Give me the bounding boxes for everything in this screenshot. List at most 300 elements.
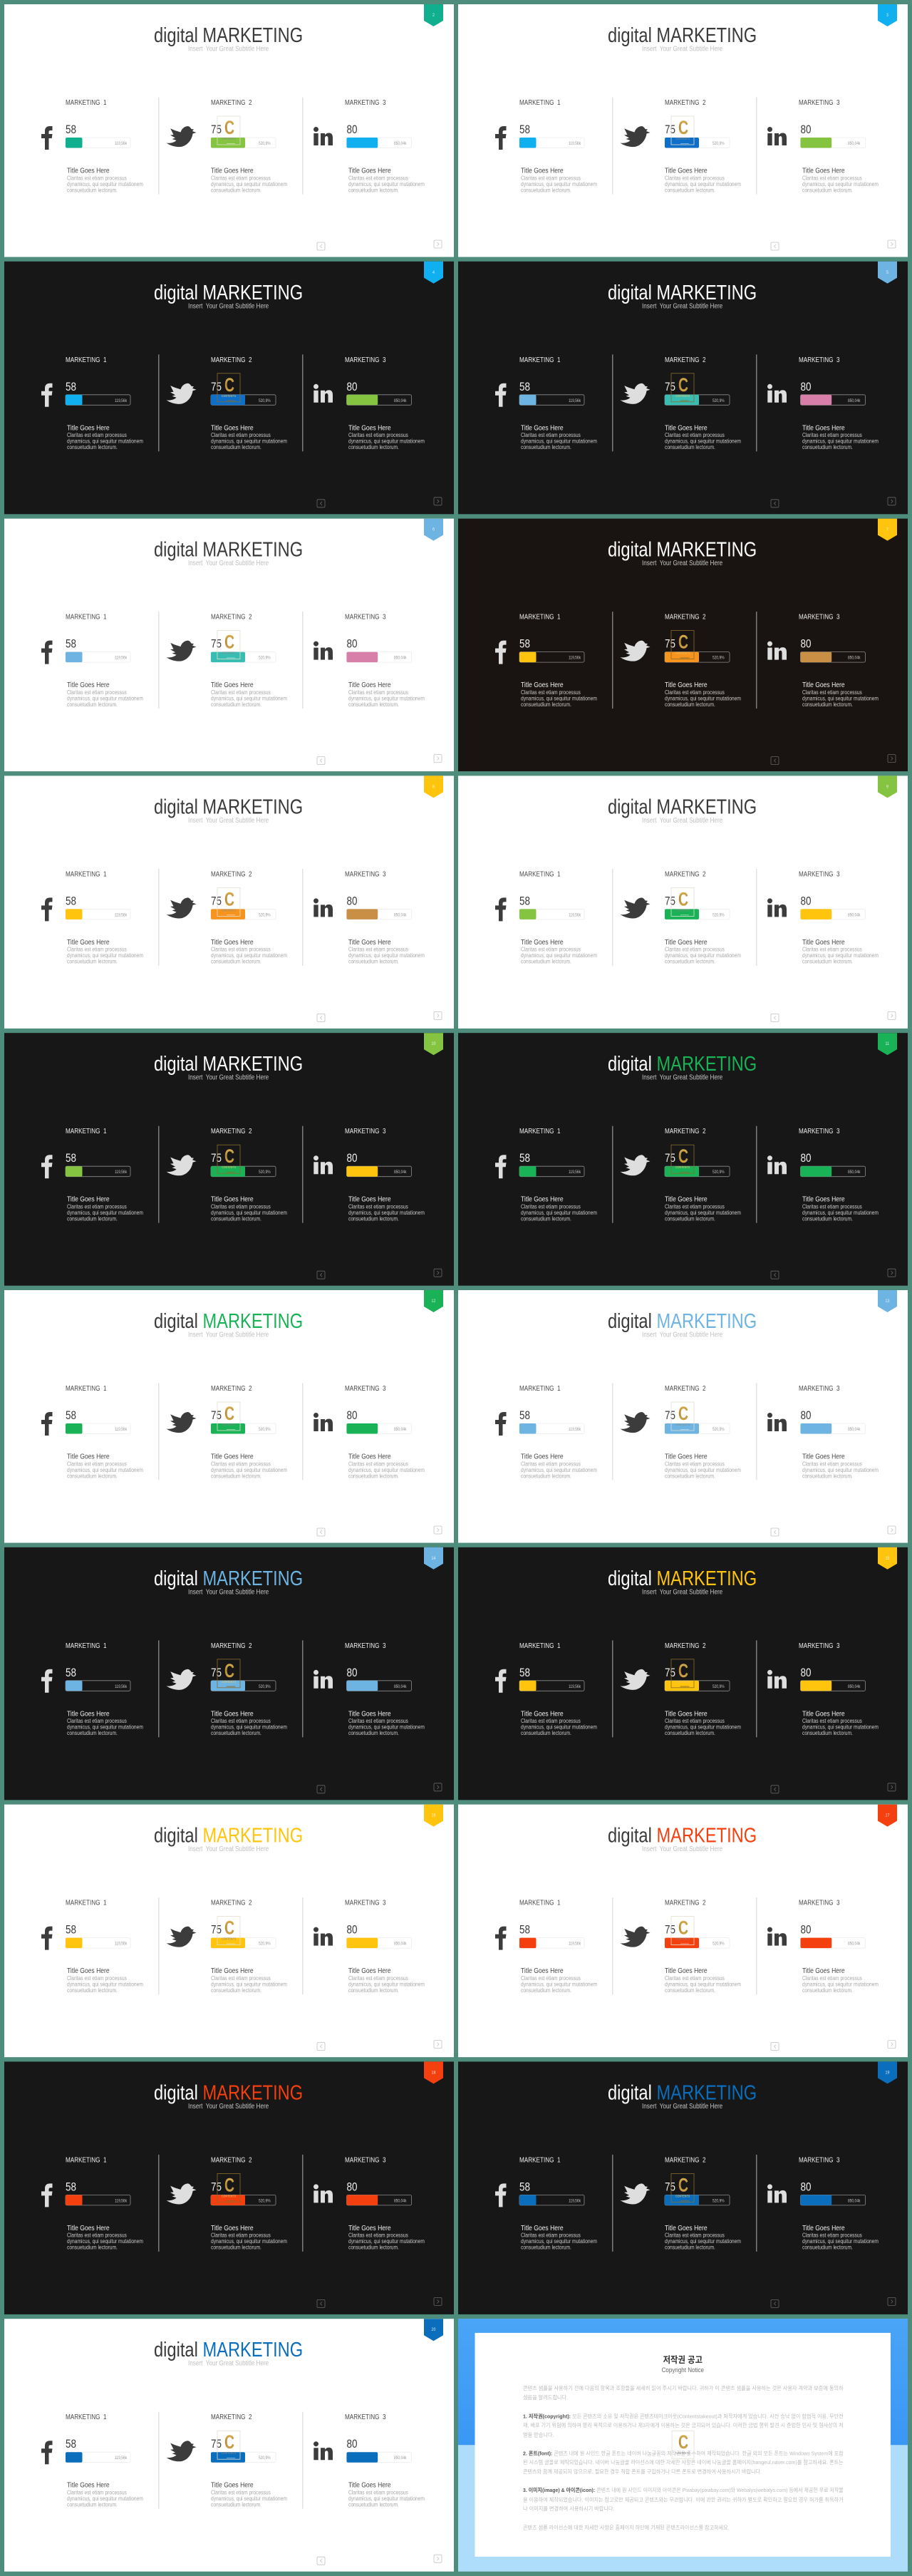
title text: Title Goes Here: [67, 424, 110, 433]
body text: Claritas est etiam processus: [67, 1974, 127, 1982]
watermark: [217, 116, 240, 145]
bar: [66, 138, 130, 148]
subtitle: Insert Your Great Subtitle Here: [188, 1588, 269, 1595]
number: 75: [211, 1923, 222, 1937]
column 3: MARKETING 3: [799, 1642, 840, 1649]
body text: Claritas est etiam processus: [67, 2232, 127, 2239]
column 3: MARKETING 3: [799, 98, 840, 106]
body text: consuetudium lectorum.: [665, 1987, 715, 1994]
nav buttons: [771, 498, 896, 508]
body text: consuetudium lectorum.: [67, 1987, 118, 1994]
column 3: MARKETING 3: [345, 356, 386, 364]
watermark: CONTENTS: [675, 651, 690, 655]
bar: 119,56k: [115, 142, 127, 146]
title: digital MARKETING: [154, 1309, 303, 1333]
watermark: C: [678, 1660, 688, 1681]
body text: Claritas est etiam processus: [348, 1974, 408, 1982]
body text: consuetudium lectorum.: [211, 2501, 261, 2508]
body text: Claritas est etiam processus: [67, 2489, 127, 2496]
icon: linkedin: [314, 1670, 333, 1689]
nav buttons: [771, 1011, 896, 1021]
subtitle: Insert Your Great Subtitle Here: [642, 1331, 722, 1339]
body text: Claritas est etiam processus: [521, 1203, 581, 1210]
bar: 119,56k: [569, 1170, 581, 1175]
body text: dynamicus, qui sequitur mutationem: [665, 1209, 741, 1216]
bar: [346, 1423, 412, 1434]
body text: dynamicus, qui sequitur mutationem: [348, 1466, 425, 1473]
number: 80: [801, 1666, 811, 1679]
body text: Claritas est etiam processus: [802, 946, 862, 953]
icon: facebook: [495, 641, 506, 664]
body text: consuetudium lectorum.: [211, 958, 261, 965]
icon: linkedin: [314, 2184, 333, 2203]
watermark: CONTENTS: [222, 1679, 236, 1684]
column 1: [495, 1127, 597, 1222]
title text: Title Goes Here: [521, 2224, 564, 2232]
bar: 850,04k: [848, 2199, 861, 2204]
column 2: [620, 1127, 741, 1222]
title text: Title Goes Here: [665, 681, 708, 689]
column 1: [495, 870, 597, 965]
panel: slide 3: [458, 4, 908, 257]
column 3: [767, 1384, 879, 1479]
body text: consuetudium lectorum.: [665, 2244, 715, 2251]
number: 58: [519, 381, 530, 393]
title: digital MARKETING: [608, 1052, 757, 1076]
title text: Title Goes Here: [802, 167, 845, 175]
body text: Claritas est etiam processus: [348, 2232, 408, 2239]
title: digital MARKETING: [608, 1309, 757, 1333]
body text: Claritas est etiam processus: [802, 431, 862, 438]
body text: dynamicus, qui sequitur mutationem: [802, 695, 879, 702]
intro paragraph: 콘텐츠 샘플을 사용하기 전에 다음의 항목과 조항들을 세세히 읽어 주시기 바랍니다. 귀하가 이 콘텐츠 샘플을 사용하는 것은 사용자 계약과 보증에 동의하: [523, 2384, 844, 2391]
body text: Claritas est etiam processus: [665, 1203, 725, 1210]
column 2: MARKETING 2: [665, 98, 706, 106]
body text: consuetudium lectorum.: [665, 443, 715, 450]
column 2: MARKETING 2: [211, 98, 252, 106]
nav buttons: [317, 2555, 442, 2565]
bar: 520,9%: [712, 398, 725, 403]
bar: [801, 909, 865, 919]
body text: consuetudium lectorum.: [665, 1729, 715, 1736]
body text: Claritas est etiam processus: [348, 175, 408, 181]
watermark: [671, 1659, 694, 1688]
title text: Title Goes Here: [348, 2481, 391, 2490]
bar: 119,56k: [569, 1684, 581, 1689]
bar: 119,56k: [115, 1684, 127, 1689]
panel: slide 17: [458, 1805, 908, 2057]
tab: 6: [432, 527, 435, 532]
body text: consuetudium lectorum.: [211, 1987, 261, 1994]
number: 80: [801, 123, 811, 136]
watermark: CONTENTS: [675, 2451, 690, 2455]
body text: Claritas est etiam processus: [67, 1717, 127, 1724]
title text: Title Goes Here: [802, 2224, 845, 2232]
body text: consuetudium lectorum.: [348, 1729, 399, 1736]
title text: Title Goes Here: [211, 1195, 254, 1204]
bar: [346, 1938, 412, 1948]
body text: consuetudium lectorum.: [211, 701, 261, 708]
bar: 520,9%: [712, 1684, 725, 1689]
number: 75: [211, 2180, 222, 2194]
subtitle: Insert Your Great Subtitle Here: [642, 1073, 722, 1081]
body text: Claritas est etiam processus: [211, 431, 271, 438]
icon: twitter: [167, 126, 197, 147]
body text: consuetudium lectorum.: [802, 1729, 853, 1736]
column 2: MARKETING 2: [665, 2156, 706, 2164]
icon: twitter: [620, 1412, 650, 1433]
column 2: [620, 98, 741, 193]
number: 58: [66, 123, 76, 136]
body text: dynamicus, qui sequitur mutationem: [802, 180, 879, 187]
icon: linkedin: [767, 1670, 787, 1689]
bar: 520,9%: [712, 656, 725, 661]
watermark: [672, 2431, 694, 2458]
column 1: MARKETING 1: [519, 2156, 561, 2164]
tab: [424, 2319, 443, 2341]
bar: 850,04k: [394, 1684, 407, 1689]
column 1: [41, 870, 143, 965]
watermark: C: [678, 2174, 688, 2195]
bar: 520,9%: [259, 656, 271, 661]
body text: dynamicus, qui sequitur mutationem: [211, 2238, 287, 2245]
bar: [66, 652, 130, 662]
column 2: MARKETING 2: [665, 870, 706, 878]
body text: consuetudium lectorum.: [665, 1215, 715, 1222]
bar: [346, 1166, 412, 1177]
column 2: [167, 98, 287, 193]
title: digital MARKETING: [608, 281, 757, 304]
column 2: [620, 1642, 741, 1736]
tab: [424, 2061, 443, 2083]
column 3: MARKETING 3: [799, 2156, 840, 2164]
number: 80: [347, 1666, 357, 1679]
body text: Claritas est etiam processus: [348, 431, 408, 438]
icon: facebook: [41, 2441, 53, 2464]
column 1: MARKETING 1: [519, 1127, 561, 1135]
number: 80: [347, 895, 357, 908]
nav buttons: [771, 755, 896, 765]
bar: 850,04k: [848, 1428, 861, 1432]
body text: consuetudium lectorum.: [211, 1215, 261, 1222]
bar: 850,04k: [394, 1428, 407, 1432]
tab: 18: [432, 2071, 436, 2076]
watermark: [217, 1145, 240, 1173]
tab: [424, 1805, 443, 1827]
number: 58: [519, 1666, 530, 1679]
tab: 8: [432, 785, 435, 790]
column 3: [767, 1127, 879, 1222]
column 3: MARKETING 3: [345, 2413, 386, 2421]
column 2: [167, 1899, 287, 1994]
column 3: MARKETING 3: [799, 356, 840, 364]
watermark: CONTENTS: [222, 2451, 236, 2455]
watermark: CONTENTS: [675, 908, 690, 912]
bar: [519, 1166, 584, 1177]
title text: Title Goes Here: [665, 1967, 708, 1975]
body text: Claritas est etiam processus: [665, 946, 725, 953]
column 1: MARKETING 1: [519, 1384, 561, 1392]
column 1: [41, 2156, 143, 2251]
body text: consuetudium lectorum.: [67, 701, 118, 708]
column 2: [620, 1899, 741, 1994]
subtitle: Insert Your Great Subtitle Here: [188, 2359, 269, 2367]
subtitle: Insert Your Great Subtitle Here: [642, 2102, 722, 2110]
title text: Title Goes Here: [67, 2224, 110, 2232]
body text: dynamicus, qui sequitur mutationem: [211, 1981, 287, 1988]
body text: consuetudium lectorum.: [802, 443, 853, 450]
column 2: MARKETING 2: [665, 356, 706, 364]
bar: 520,9%: [259, 142, 271, 146]
title text: Title Goes Here: [521, 1967, 564, 1975]
body text: dynamicus, qui sequitur mutationem: [211, 1209, 287, 1216]
body text: dynamicus, qui sequitur mutationem: [521, 1724, 597, 1731]
watermark: CONTENTS: [675, 393, 690, 398]
body text: dynamicus, qui sequitur mutationem: [67, 1466, 143, 1473]
bar: [665, 652, 730, 662]
panel: slide 4: [4, 262, 454, 514]
body text: consuetudium lectorum.: [211, 187, 261, 193]
column 1: MARKETING 1: [519, 870, 561, 878]
bar: [211, 909, 276, 919]
title: digital MARKETING: [154, 1052, 303, 1076]
watermark: CONTENTS: [675, 1423, 690, 1426]
column 3: MARKETING 3: [345, 1899, 386, 1907]
body text: consuetudium lectorum.: [521, 443, 571, 450]
icon: linkedin: [767, 384, 787, 403]
body text: dynamicus, qui sequitur mutationem: [665, 695, 741, 702]
number: 58: [66, 1666, 76, 1679]
column 2: MARKETING 2: [665, 1899, 706, 1907]
title text: Title Goes Here: [521, 1195, 564, 1204]
body text: consuetudium lectorum.: [521, 187, 571, 193]
bar: [665, 1166, 730, 1177]
body text: consuetudium lectorum.: [521, 1473, 571, 1479]
title text: Title Goes Here: [665, 424, 708, 433]
body text: Claritas est etiam processus: [67, 1203, 127, 1210]
title: digital MARKETING: [154, 1567, 303, 1590]
body text: dynamicus, qui sequitur mutationem: [211, 2495, 287, 2502]
bar: [519, 1423, 584, 1434]
number: 80: [801, 637, 811, 651]
icon: facebook: [41, 126, 53, 150]
body text: consuetudium lectorum.: [521, 1987, 571, 1994]
column 2: MARKETING 2: [211, 356, 252, 364]
column 1: MARKETING 1: [66, 1899, 107, 1907]
body text: consuetudium lectorum.: [802, 2244, 853, 2251]
title text: Title Goes Here: [665, 1453, 708, 1461]
bar: 520,9%: [259, 913, 271, 918]
panel: slide 19: [458, 2061, 908, 2314]
bar: 850,04k: [394, 913, 407, 918]
panel: slide 12: [4, 1290, 454, 1542]
column 3: MARKETING 3: [345, 1384, 386, 1392]
body text: dynamicus, qui sequitur mutationem: [67, 952, 143, 959]
column 3: MARKETING 3: [345, 1127, 386, 1135]
body text: consuetudium lectorum.: [665, 187, 715, 193]
number: 75: [665, 1409, 675, 1422]
bar: [346, 909, 412, 919]
nav buttons: [317, 755, 442, 765]
bar: 850,04k: [394, 142, 407, 146]
subtitle: Insert Your Great Subtitle Here: [188, 1073, 269, 1081]
title text: Title Goes Here: [665, 1195, 708, 1204]
subtitle: Insert Your Great Subtitle Here: [642, 302, 722, 309]
subtitle: Insert Your Great Subtitle Here: [642, 45, 722, 53]
title text: Title Goes Here: [521, 167, 564, 175]
watermark: C: [224, 1917, 234, 1938]
tab: [424, 4, 443, 26]
body text: consuetudium lectorum.: [348, 1215, 399, 1222]
number: 80: [347, 1409, 357, 1422]
title text: Title Goes Here: [521, 1710, 564, 1719]
body text: dynamicus, qui sequitur mutationem: [67, 438, 143, 445]
body text: consuetudium lectorum.: [802, 958, 853, 965]
bar: [665, 909, 730, 919]
body text: dynamicus, qui sequitur mutationem: [802, 952, 879, 959]
column 3: MARKETING 3: [799, 1127, 840, 1135]
bar: 520,9%: [259, 398, 271, 403]
bar: [211, 1423, 276, 1434]
bar: 119,56k: [569, 142, 581, 146]
bar: [665, 138, 730, 148]
column 3: [314, 2413, 425, 2508]
icon: facebook: [41, 2183, 53, 2207]
column 2: [620, 1384, 741, 1479]
panel: slide 15: [458, 1547, 908, 1800]
body text: consuetudium lectorum.: [802, 1987, 853, 1994]
column 3: [314, 1127, 425, 1222]
number: 80: [801, 2180, 811, 2194]
paragraph: image and icon: 나 이미지를 변경하여 사용하시기 바랍니다.: [523, 2505, 614, 2512]
bar: 850,04k: [848, 142, 861, 146]
title text: Title Goes Here: [211, 2481, 254, 2490]
watermark: [671, 1917, 694, 1945]
body text: dynamicus, qui sequitur mutationem: [67, 1981, 143, 1988]
panel: slide 13: [458, 1290, 908, 1542]
body text: consuetudium lectorum.: [348, 1473, 399, 1479]
column 1: MARKETING 1: [519, 1642, 561, 1649]
number: 58: [519, 123, 530, 136]
tab: [424, 776, 443, 798]
body text: Claritas est etiam processus: [211, 2232, 271, 2239]
paragraph: font: 된 시스템 글꼴로 제작되었습니다. 네이버 나눔글꼴 라이선스에 대한 자세한 사항은 네이버 나눔글꼴 홈페이지(hangeul.naver.com)를 참고하세요. 폰트는: [523, 2458, 844, 2466]
tab: 5: [886, 270, 889, 275]
bar: [211, 1166, 276, 1177]
body text: consuetudium lectorum.: [348, 1987, 399, 1994]
title text: Title Goes Here: [211, 681, 254, 689]
bar: 520,9%: [712, 142, 725, 146]
column 1: MARKETING 1: [519, 98, 561, 106]
icon: linkedin: [767, 1413, 787, 1431]
number: 58: [66, 637, 76, 651]
column 2: MARKETING 2: [211, 1899, 252, 1907]
bar: 850,04k: [394, 2199, 407, 2204]
body text: dynamicus, qui sequitur mutationem: [348, 1981, 425, 1988]
bar: [665, 1938, 730, 1948]
notice card: [475, 2333, 891, 2557]
body text: consuetudium lectorum.: [211, 1473, 261, 1479]
body text: Claritas est etiam processus: [665, 2232, 725, 2239]
number: 58: [66, 1923, 76, 1937]
tab: [878, 1547, 897, 1570]
intro paragraph: 셨음을 알려드립니다.: [523, 2394, 568, 2401]
panel: slide 18: [4, 2061, 454, 2314]
nav buttons: [317, 240, 442, 250]
tab: 9: [886, 785, 889, 790]
bar: [211, 2195, 276, 2205]
paragraph: font: 콘텐츠와 함께 제공되지 않으므로, 필요한 경우 적합 폰트를 구입하거나 다른 폰트로 변경하여 사용하시기 바랍니다.: [523, 2468, 762, 2475]
tab: 17: [886, 1813, 889, 1818]
column 2: MARKETING 2: [665, 613, 706, 621]
body text: consuetudium lectorum.: [211, 443, 261, 450]
body text: Claritas est etiam processus: [348, 689, 408, 696]
body text: Claritas est etiam processus: [211, 1717, 271, 1724]
title: digital MARKETING: [608, 24, 757, 47]
column 3: MARKETING 3: [345, 1642, 386, 1649]
title text: Title Goes Here: [211, 1967, 254, 1975]
body text: Claritas est etiam processus: [521, 175, 581, 181]
body text: Claritas est etiam processus: [211, 946, 271, 953]
tab: 14: [432, 1556, 436, 1561]
watermark: CONTENTS: [675, 1937, 690, 1941]
column 1: [495, 1384, 597, 1479]
body text: dynamicus, qui sequitur mutationem: [67, 695, 143, 702]
column 2: [167, 1642, 287, 1736]
number: 80: [801, 1152, 811, 1165]
body text: dynamicus, qui sequitur mutationem: [521, 1981, 597, 1988]
column 2: MARKETING 2: [211, 1642, 252, 1649]
column 1: [495, 98, 597, 193]
title: digital MARKETING: [154, 795, 303, 818]
title text: Title Goes Here: [521, 1453, 564, 1461]
body text: Claritas est etiam processus: [665, 1974, 725, 1982]
title: digital MARKETING: [154, 537, 303, 561]
number: 80: [347, 123, 357, 136]
watermark: CONTENTS: [222, 651, 236, 655]
icon: twitter: [167, 1669, 197, 1690]
number: 58: [519, 1923, 530, 1937]
panel: slide 11: [458, 1033, 908, 1286]
number: 80: [347, 1923, 357, 1937]
icon: facebook: [41, 1927, 53, 1950]
body text: Claritas est etiam processus: [211, 1203, 271, 1210]
body text: consuetudium lectorum.: [67, 1215, 118, 1222]
bar: 850,04k: [848, 656, 861, 661]
watermark: C: [224, 888, 234, 910]
body text: dynamicus, qui sequitur mutationem: [211, 952, 287, 959]
title text: Title Goes Here: [348, 938, 391, 947]
icon: twitter: [620, 641, 650, 661]
body text: Claritas est etiam processus: [665, 1460, 725, 1467]
body text: dynamicus, qui sequitur mutationem: [67, 2238, 143, 2245]
paragraph: image and icon: [523, 2486, 844, 2512]
panel: slide 20: [4, 2319, 454, 2572]
column 2: MARKETING 2: [665, 1384, 706, 1392]
subtitle: Insert Your Great Subtitle Here: [188, 45, 269, 53]
title text: Title Goes Here: [67, 1710, 110, 1719]
icon: linkedin: [767, 2184, 787, 2203]
bar: 119,56k: [569, 1428, 581, 1432]
body text: consuetudium lectorum.: [521, 2244, 571, 2251]
bar: 850,04k: [848, 1684, 861, 1689]
panel: slide 2: [4, 4, 454, 257]
subtitle: Insert Your Great Subtitle Here: [188, 816, 269, 824]
bar: 119,56k: [115, 913, 127, 918]
number: 75: [211, 1666, 222, 1679]
title: digital MARKETING: [608, 795, 757, 818]
body text: Claritas est etiam processus: [521, 946, 581, 953]
